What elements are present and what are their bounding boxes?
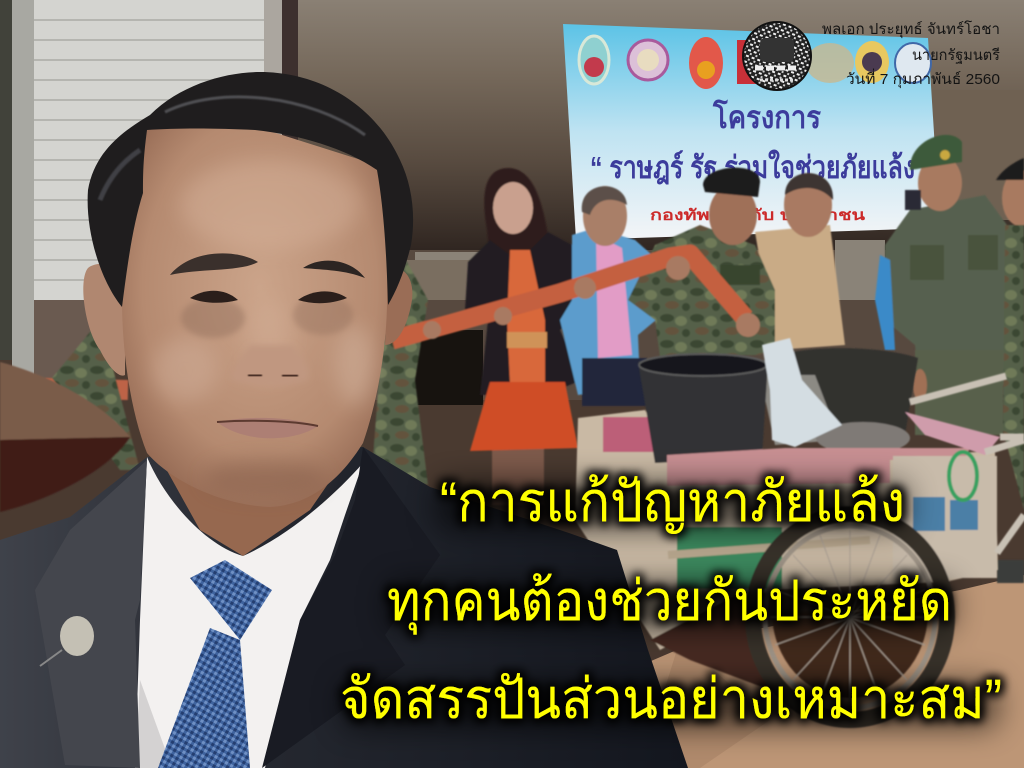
right panel [893,456,997,578]
seal of the prime minister's office [742,21,812,91]
water cart [575,338,1024,720]
soldier left of main figure [52,320,140,470]
banner heading: โครงการ [712,99,821,135]
orange water hose [392,254,745,340]
banner [563,24,940,240]
group of people at the back [45,135,1024,583]
dark glow behind quote [345,485,995,725]
cart wheel [753,514,947,720]
neck [150,430,365,556]
green hose [949,452,977,500]
buckets [793,348,918,435]
date: วันที่ 7 กุมภาพันธ์ 2560 [846,68,1000,89]
eyebrows [170,253,258,275]
woman in orange dress [465,168,585,505]
tie [158,560,272,768]
mouth [217,418,318,438]
quote line 1: “การแก้ปัญหาภัยแล้ง [440,470,905,534]
water stream [762,338,842,447]
man with pink shirt and blue jacket [560,186,656,406]
ears [83,264,125,376]
cart body [575,410,998,650]
tan uniform officer [755,173,845,350]
flowered cloth [667,448,970,486]
lapels [35,460,147,768]
quote text [340,470,1002,730]
water tank [296,0,1024,252]
hands on hose [423,256,760,339]
banner sub text: กองทัพ ร่วมกับ ประชาชน [650,207,866,224]
lapel pin [40,616,94,666]
eyes [190,291,238,303]
role: นายกรัฐมนตรี [912,47,1000,64]
ground [380,405,1024,768]
main figure: prime minister [0,72,688,768]
face [122,128,387,507]
attribution text [822,20,1000,89]
far-right soldier [996,158,1024,583]
hair [88,72,413,307]
pink inside [603,417,653,452]
banner slogan: “ ราษฎร์ รัฐ ร่วมใจช่วยภัยแล้ง [590,149,915,188]
cheek highlights [153,300,375,496]
shirt [135,457,363,768]
left hose segment [45,388,128,390]
rolling shutter [0,0,298,380]
handles [910,376,1024,553]
name: พลเอก ประยุทธ์ จันทร์โอชา [822,20,1000,39]
forehead highlight [180,160,360,250]
green panels [677,527,782,589]
eye bags [181,298,245,338]
bowl at bottom-left [0,362,130,512]
mud under cart [650,590,770,690]
soldier with green beret [875,135,1024,435]
plate [816,422,910,454]
soldier with black beret [628,168,775,357]
suit [0,447,688,768]
nose [231,345,309,386]
banner logos [579,36,931,89]
under-tank structures [296,250,1024,400]
quote line 2: ทุกคนต้องช่วยกันประหยัด [387,569,952,635]
